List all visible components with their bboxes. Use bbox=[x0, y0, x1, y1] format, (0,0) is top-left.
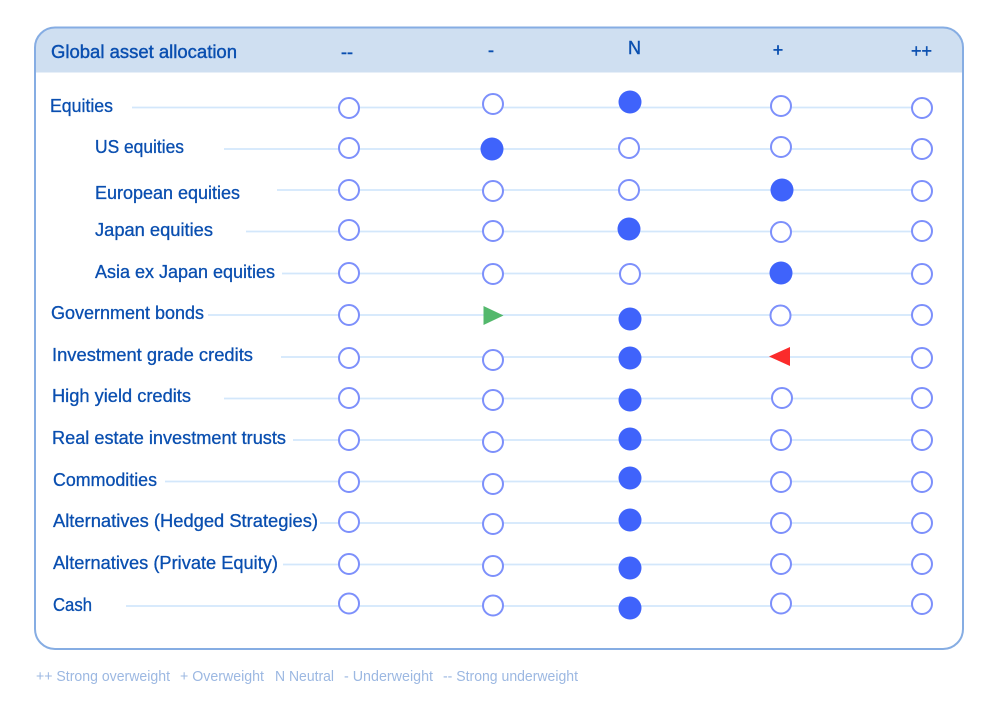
column headings: ++ bbox=[911, 41, 932, 61]
row: Investment grade credits bbox=[52, 345, 932, 370]
row: High yield credits: High yield credits bbox=[52, 386, 191, 406]
row: European equities bbox=[95, 178, 932, 203]
panel outline bbox=[35, 28, 963, 649]
row: Alternatives (Hedged Strategies) bbox=[53, 508, 932, 534]
legend: + Overweight bbox=[180, 669, 264, 685]
row: Alternatives (Hedged Strategies): Alternatives (Hedged Strategies) bbox=[53, 511, 318, 531]
header band bbox=[35, 28, 963, 72]
icon: green right triangle bbox=[484, 306, 504, 325]
row: Alternatives (Private Equity) bbox=[53, 553, 932, 580]
row: European equities: European equities bbox=[95, 183, 240, 203]
row: Real estate investment trusts bbox=[52, 428, 932, 452]
panel: allocation table bbox=[35, 28, 963, 649]
row: Cash: Cash bbox=[53, 595, 92, 615]
column headings: - bbox=[488, 40, 494, 60]
row: Commodities bbox=[53, 466, 932, 494]
row: Government bonds bbox=[51, 303, 932, 330]
column headings bbox=[341, 38, 932, 62]
row: Real estate investment trusts: Real estate investment trusts bbox=[52, 428, 286, 448]
legend: - Underweight bbox=[344, 669, 433, 685]
row: Asia ex Japan equities: Asia ex Japan equities bbox=[95, 262, 275, 282]
row: Alternatives (Private Equity): Alternatives (Private Equity) bbox=[53, 553, 278, 573]
column headings: + bbox=[773, 40, 783, 60]
row: US equities: US equities bbox=[95, 137, 184, 157]
row: Japan equities: Japan equities bbox=[95, 220, 213, 240]
legend bbox=[36, 669, 578, 685]
row: Equities: Equities bbox=[50, 96, 113, 116]
row: Cash bbox=[53, 594, 932, 620]
legend: ++ Strong overweight bbox=[36, 669, 170, 685]
icon: red left triangle bbox=[769, 347, 790, 366]
column headings: -- bbox=[341, 42, 353, 62]
legend: N Neutral bbox=[275, 669, 334, 685]
row: Government bonds: Government bonds bbox=[51, 303, 204, 323]
row: Equities bbox=[50, 90, 932, 118]
row: Investment grade credits: Investment grade credits bbox=[52, 345, 253, 365]
row: High yield credits bbox=[52, 386, 932, 412]
legend: -- Strong underweight bbox=[443, 669, 578, 685]
row: Japan equities bbox=[95, 218, 932, 242]
row: US equities bbox=[95, 137, 932, 160]
row: Commodities: Commodities bbox=[53, 470, 157, 490]
title: Global asset allocation bbox=[51, 42, 237, 62]
row: Asia ex Japan equities bbox=[95, 262, 932, 284]
column headings: N bbox=[628, 38, 641, 58]
